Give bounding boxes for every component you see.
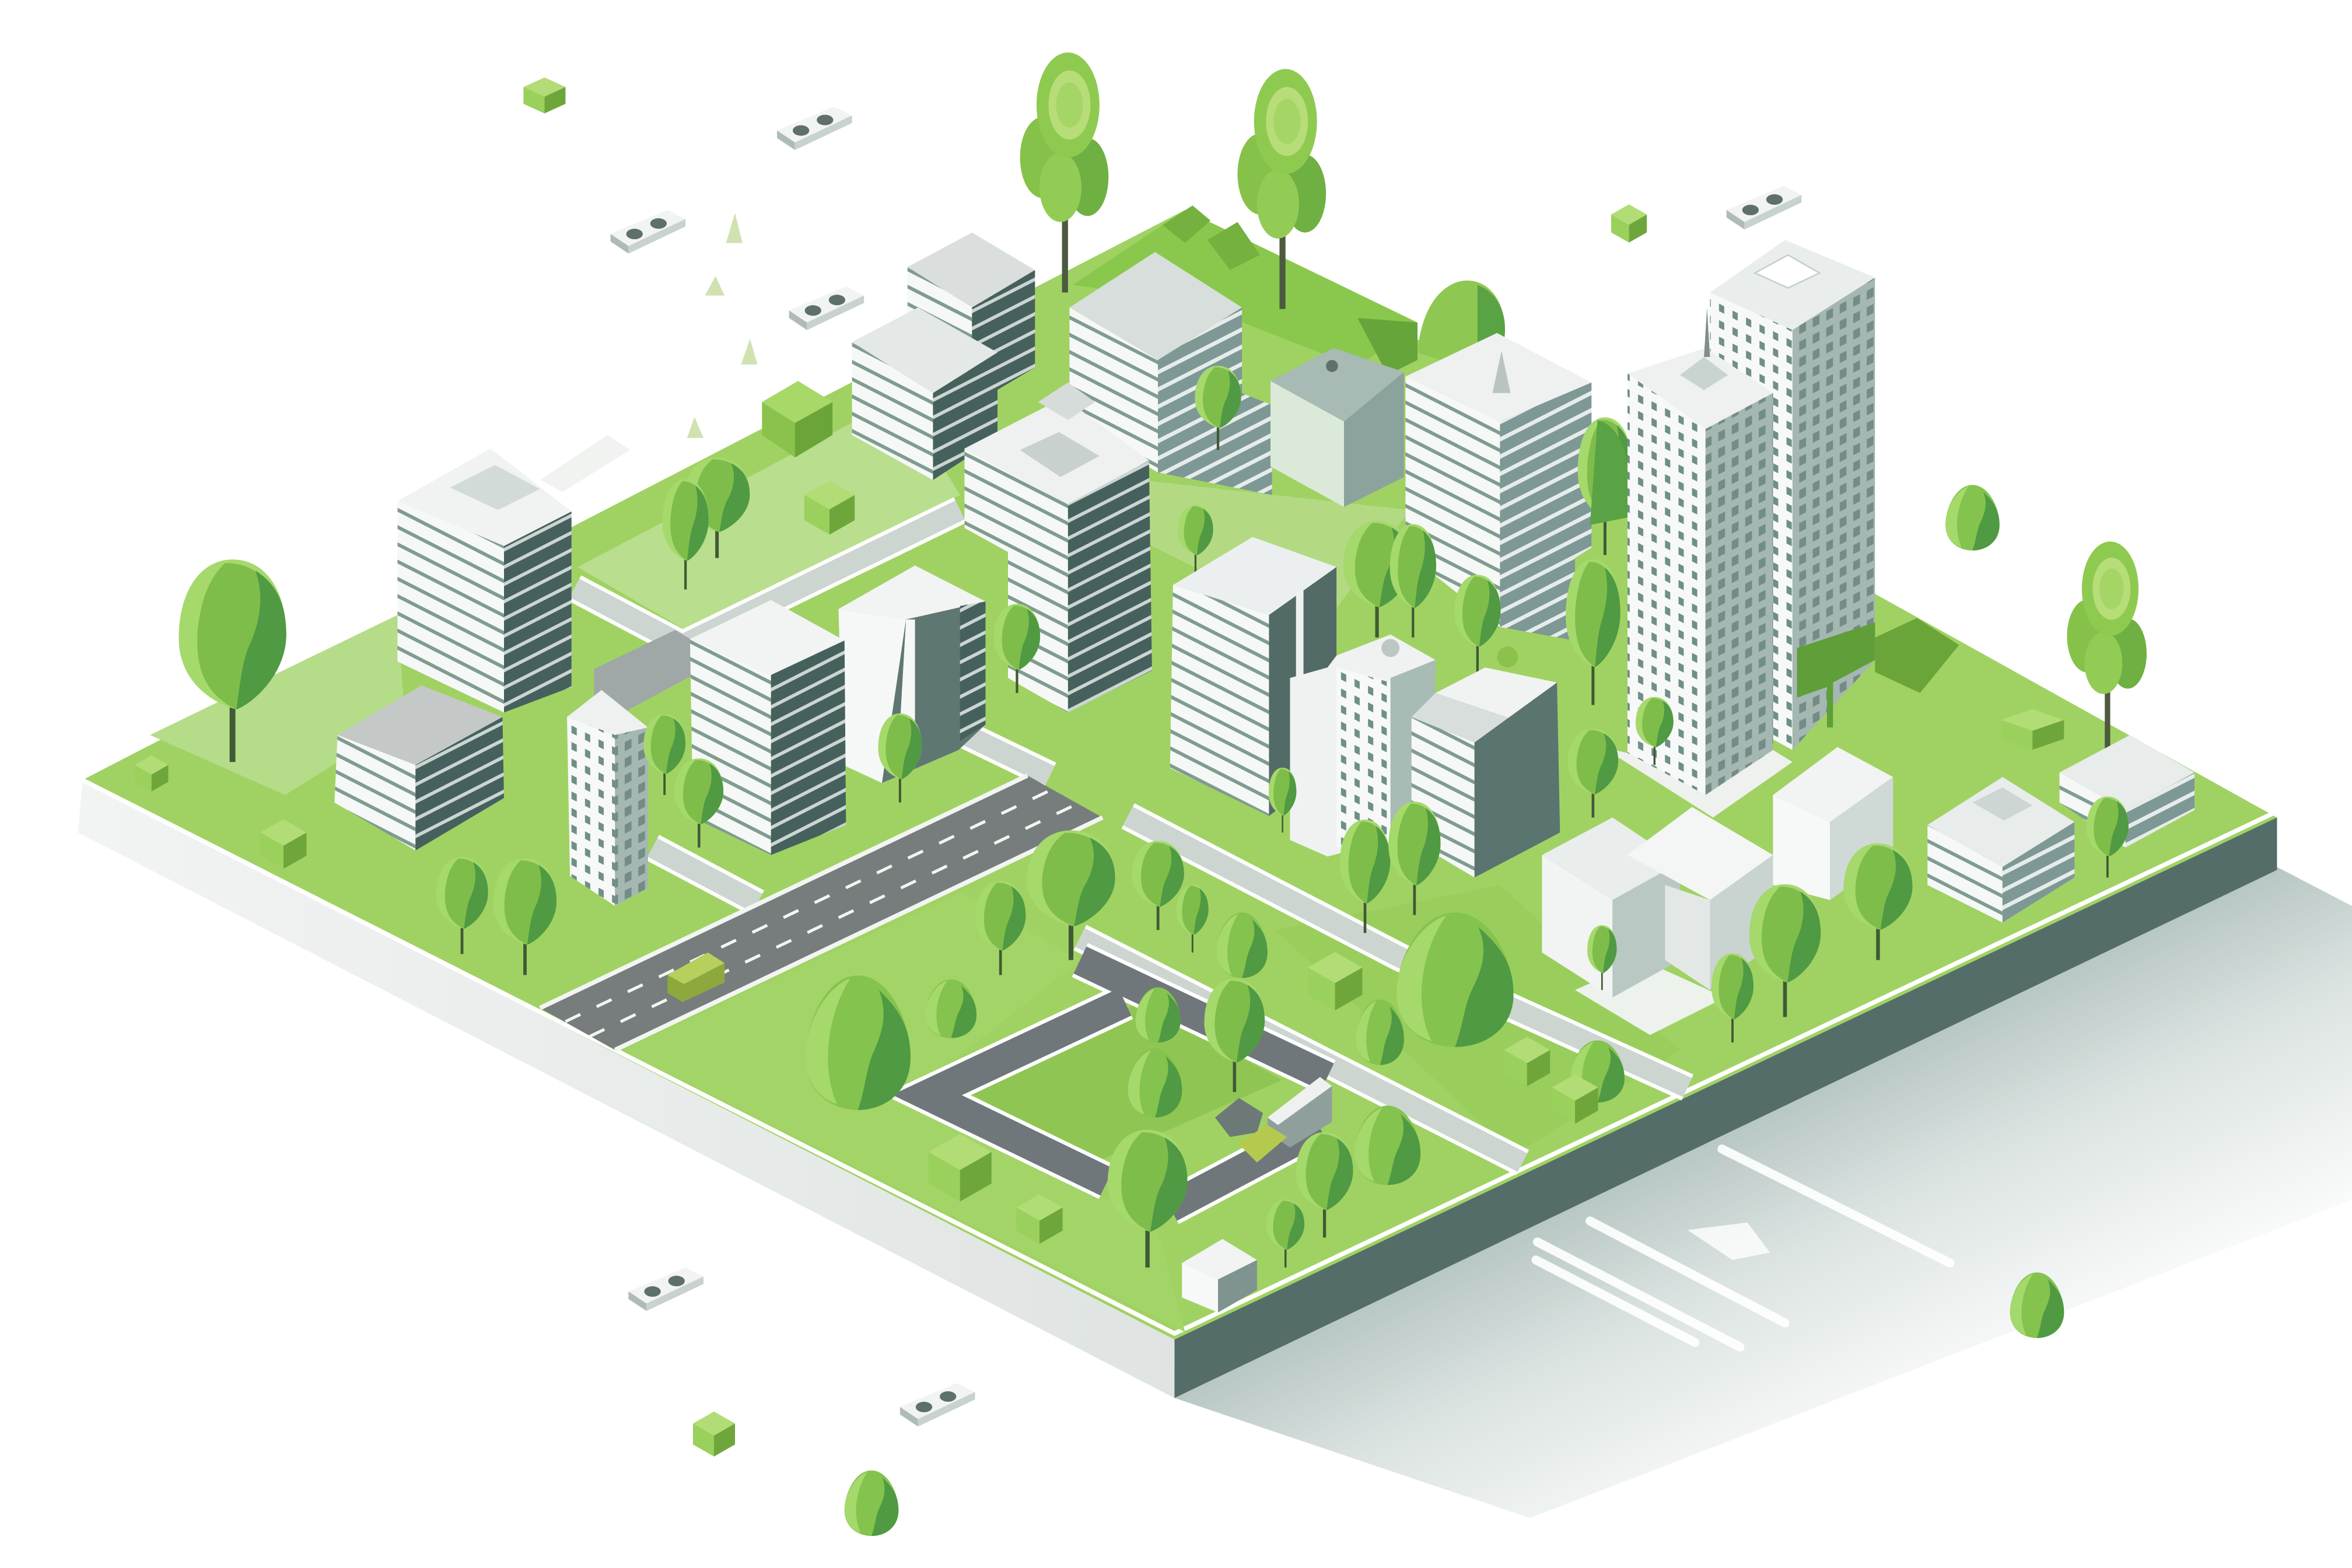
truck and car in park xyxy=(1215,1077,1332,1163)
light streets xyxy=(575,510,1688,1163)
striped block xyxy=(690,600,846,855)
block building with spire xyxy=(1405,333,1591,640)
tall tower front xyxy=(1602,307,1793,817)
tall tree left xyxy=(1020,52,1108,292)
tall tower rear xyxy=(1710,240,1875,750)
park cubes xyxy=(929,952,1598,1244)
block building left xyxy=(397,435,630,712)
floating bush lower right xyxy=(2010,1272,2064,1338)
park loop road xyxy=(927,960,1328,1208)
floating car 6 xyxy=(900,1383,975,1426)
stepped building rear block xyxy=(908,233,1035,405)
right hedges xyxy=(1797,618,2064,750)
rear right greenery xyxy=(1566,417,1632,705)
low building right xyxy=(1927,777,2074,922)
floating car 3 xyxy=(789,286,864,330)
floating cube top right xyxy=(1611,204,1647,243)
street trees left xyxy=(135,713,922,975)
centre stepped building xyxy=(964,383,1152,712)
block building centre right xyxy=(1170,537,1336,816)
tall tree far right xyxy=(2067,541,2147,758)
tall tree right xyxy=(1237,69,1326,309)
floating bush right xyxy=(1945,485,2000,551)
courtyard complex xyxy=(1542,807,1773,1035)
park trees xyxy=(806,831,1625,1268)
floating bush bottom xyxy=(845,1471,898,1536)
windowed building xyxy=(1290,635,1436,856)
floating cube bottom xyxy=(693,1412,735,1457)
mid trees xyxy=(994,505,1500,693)
main road xyxy=(540,775,1102,1050)
platform base xyxy=(78,210,2277,1398)
stepped building front block xyxy=(852,307,998,480)
back trees and hill xyxy=(1020,52,1505,375)
right cluster trees xyxy=(1269,697,1674,933)
white block with side panels xyxy=(838,565,985,783)
white block right xyxy=(1773,747,1893,900)
park loop road outline xyxy=(927,960,1328,1208)
floating car 4 xyxy=(1727,186,1801,229)
floating car 2 xyxy=(611,210,685,254)
platform cast shadow xyxy=(1174,867,2352,1518)
floating car 1 xyxy=(777,107,852,150)
front white box xyxy=(1182,1239,1257,1312)
corner building xyxy=(1412,646,1560,877)
lawn patches xyxy=(150,210,1680,1332)
floating leaves xyxy=(687,213,758,438)
low block left xyxy=(334,685,504,850)
floating cube top left xyxy=(523,78,565,113)
roads xyxy=(540,510,1688,1208)
truck on main road xyxy=(667,953,724,1002)
low building far right xyxy=(2060,735,2194,848)
floating car 5 xyxy=(628,1268,704,1311)
right trees xyxy=(1587,796,2129,1042)
connector block xyxy=(594,630,693,717)
left tree xyxy=(178,559,286,762)
block building rear centre xyxy=(1069,252,1272,495)
small tower xyxy=(567,690,648,906)
small tree by glass building xyxy=(1195,366,1241,450)
small back garden xyxy=(663,381,855,590)
glass building xyxy=(1270,348,1404,507)
